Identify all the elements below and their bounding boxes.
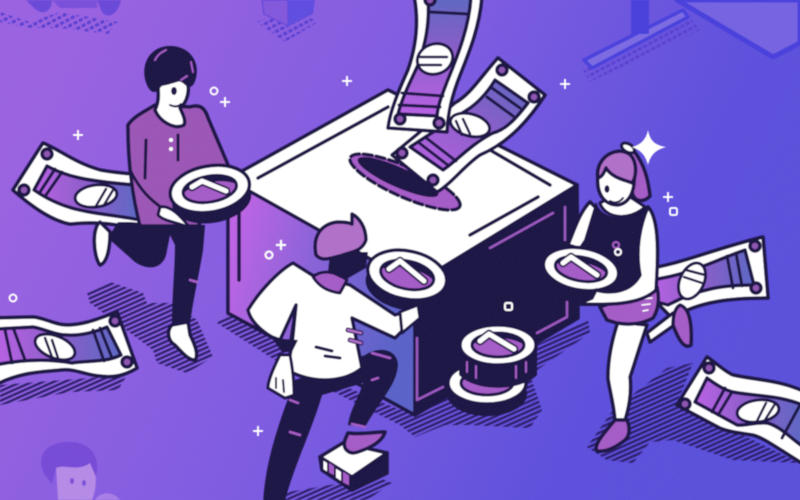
chest: [600, 197, 645, 216]
coin: [166, 159, 255, 229]
box left face: [228, 179, 415, 415]
background ghost person: [41, 442, 120, 500]
bottom coin: [447, 362, 527, 416]
person: right with coin: [538, 141, 691, 451]
sparkles: [10, 76, 677, 436]
beard: [328, 252, 368, 280]
right arm: [578, 207, 658, 304]
hand rag: [268, 355, 294, 398]
hair: [598, 151, 636, 183]
background furniture: top box: [257, 0, 318, 42]
collar: [313, 272, 347, 293]
box right face: [415, 185, 578, 415]
background furniture: top-left cart: [0, 0, 121, 34]
torso: [128, 105, 228, 226]
bill: bottom-left: [0, 312, 137, 385]
coin numeral one: [192, 181, 226, 191]
star: [632, 130, 666, 165]
front shoe: [169, 322, 197, 360]
person: centre with coin: [248, 214, 451, 500]
shoe: [596, 420, 629, 451]
hand fingers on hip: [348, 330, 361, 343]
tank top: [575, 204, 648, 305]
tank rings: [613, 242, 619, 248]
coin: [538, 242, 622, 308]
box top face: [228, 90, 577, 284]
scrunchie: [620, 141, 636, 155]
right hand: [400, 305, 420, 333]
standing leg: [608, 322, 647, 420]
coin numeral one: [389, 261, 424, 281]
coin: [361, 243, 451, 318]
face: [598, 165, 634, 205]
shadow: right person and bill: [587, 363, 800, 463]
shorts: [600, 287, 658, 324]
slot: [344, 144, 466, 220]
back shoe: [94, 222, 110, 265]
bill: lower right: [677, 357, 800, 465]
shadow: block: [283, 477, 392, 500]
bill: left: [13, 143, 142, 230]
left arm: [568, 202, 598, 250]
background furniture: desk: [582, 0, 800, 82]
block: [320, 443, 387, 490]
ballot box: [228, 90, 578, 415]
hair: [144, 46, 197, 92]
coin stack: [447, 325, 537, 416]
standing leg: [165, 225, 205, 325]
coin numeral one: [563, 257, 597, 275]
buttons: [169, 138, 173, 142]
shadow: bottom-left bill: [0, 375, 127, 405]
bill: right: [640, 237, 768, 318]
bill: angled in slot: [392, 58, 545, 192]
hand: [158, 207, 190, 228]
top coin: [459, 325, 537, 388]
ponytail: [628, 150, 650, 201]
legs: [263, 350, 398, 500]
shoe: [344, 432, 385, 453]
shadow: box: [217, 313, 590, 437]
neck and face: [155, 78, 188, 127]
back leg: [108, 222, 172, 267]
back leg: [647, 313, 677, 342]
bill: vertical falling: [388, 0, 482, 132]
shadow: left person: [87, 282, 213, 373]
hair: [315, 214, 366, 259]
person: left with coin: [94, 46, 255, 360]
shirt: [248, 263, 418, 380]
back shoe: [673, 305, 691, 346]
